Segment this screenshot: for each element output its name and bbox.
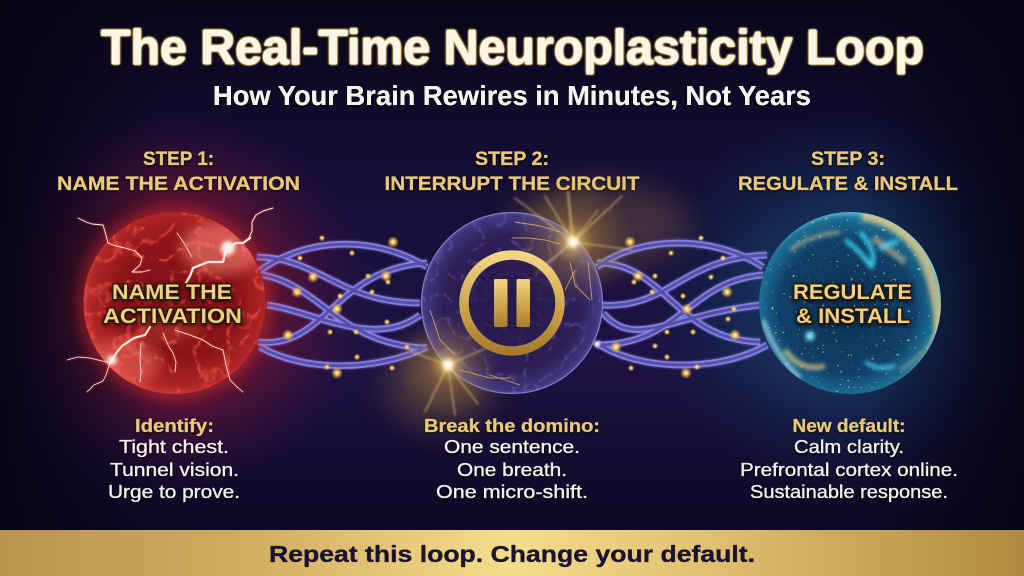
glowing particles: right — [610, 235, 741, 379]
subtitle: How Your Brain Rewires in Minutes, Not Years — [213, 80, 811, 111]
label: name the activation: ACTIVATION — [103, 305, 242, 328]
heading: step 3: STEP 3: — [811, 148, 885, 170]
heading: step 3 — [738, 148, 958, 195]
text block: break the domino: One micro-shift. — [436, 482, 588, 502]
text block: new default: New default: — [792, 416, 906, 436]
text block: new default: Prefrontal cortex online. — [740, 460, 958, 480]
label: regulate and install: & INSTALL — [796, 305, 910, 328]
label: regulate and install — [793, 281, 912, 328]
label: regulate and install: REGULATE — [793, 281, 912, 304]
heading: step 3: REGULATE & INSTALL — [738, 173, 958, 195]
text block: new default — [740, 416, 958, 502]
icon: gold sparks — [396, 180, 635, 417]
text block: identify: Urge to prove. — [108, 482, 240, 502]
title: The Real-Time Neuroplasticity Loop — [101, 20, 924, 75]
label: name the activation: NAME THE — [112, 281, 232, 304]
panel: blue sphere, regulate and install — [759, 212, 941, 394]
heading: step 2: STEP 2: — [475, 148, 549, 170]
heading: step 2 — [384, 148, 640, 195]
text block: identify: Tunnel vision. — [110, 460, 239, 480]
neural strands: left — [257, 244, 427, 366]
glowing particles: left — [282, 235, 410, 379]
heading: step 2: INTERRUPT THE CIRCUIT — [384, 173, 640, 195]
text block: new default: Calm clarity. — [794, 437, 904, 457]
heading: step 1: STEP 1: — [143, 148, 214, 170]
text block: identify: Tight chest. — [119, 437, 229, 457]
text block: new default: Sustainable response. — [750, 482, 948, 502]
heading: step 1 — [57, 148, 300, 195]
heading: step 1: NAME THE ACTIVATION — [57, 173, 300, 195]
text block: identify — [108, 416, 240, 502]
footer band — [0, 530, 1024, 576]
neural strands: right — [597, 243, 767, 365]
text block: break the domino: One sentence. — [444, 437, 580, 457]
text block: break the domino: Break the domino: — [424, 416, 600, 436]
text block: break the domino: One breath. — [457, 460, 567, 480]
footer band: Repeat this loop. Change your default. — [269, 541, 755, 567]
text block: identify: Identify: — [135, 416, 214, 436]
label: name the activation — [103, 281, 242, 328]
panel: purple sphere, interrupt the circuit — [396, 180, 635, 417]
icon: lightning bolts — [67, 208, 273, 392]
soft gold haze around central sphere — [385, 181, 690, 430]
icon: pause button — [464, 255, 560, 351]
panel: red sphere, name the activation — [67, 205, 273, 401]
text block: break the domino — [424, 416, 600, 502]
